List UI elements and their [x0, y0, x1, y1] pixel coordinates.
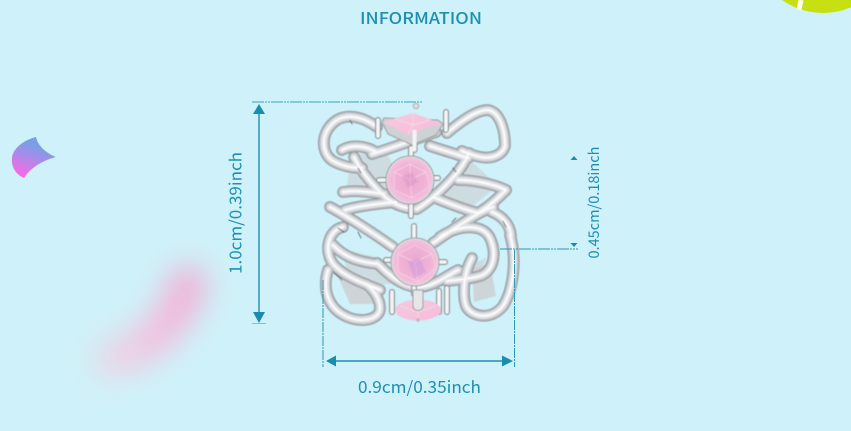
bottom gem — [395, 290, 441, 322]
height dimension: 1.0cm/0.39inch — [222, 102, 423, 324]
width dimension: 0.9cm/0.35inch — [323, 250, 514, 398]
decorative tennis ball — [752, 0, 851, 13]
dark creases on the metal — [334, 120, 506, 280]
blurred pink swoosh — [112, 284, 188, 360]
height dimension: 1.0cm/0.39inch: 1.0cm/0.39inch — [222, 152, 246, 274]
top square gem — [382, 103, 443, 150]
decorative wing shape — [12, 137, 56, 178]
upper round gem — [386, 156, 434, 204]
silver charm with pink gems — [324, 103, 514, 322]
title: INFORMATION — [360, 5, 482, 29]
metal band structure — [324, 110, 514, 320]
setting prongs — [378, 112, 447, 312]
backing shading behind the bands — [336, 150, 498, 304]
width dimension: 0.9cm/0.35inch: 0.9cm/0.35inch — [358, 374, 481, 398]
gap dimension: 0.45cm/0.18inch — [500, 146, 604, 258]
lower round gem — [391, 238, 439, 286]
gap dimension: 0.45cm/0.18inch: 0.45cm/0.18inch — [583, 146, 604, 258]
